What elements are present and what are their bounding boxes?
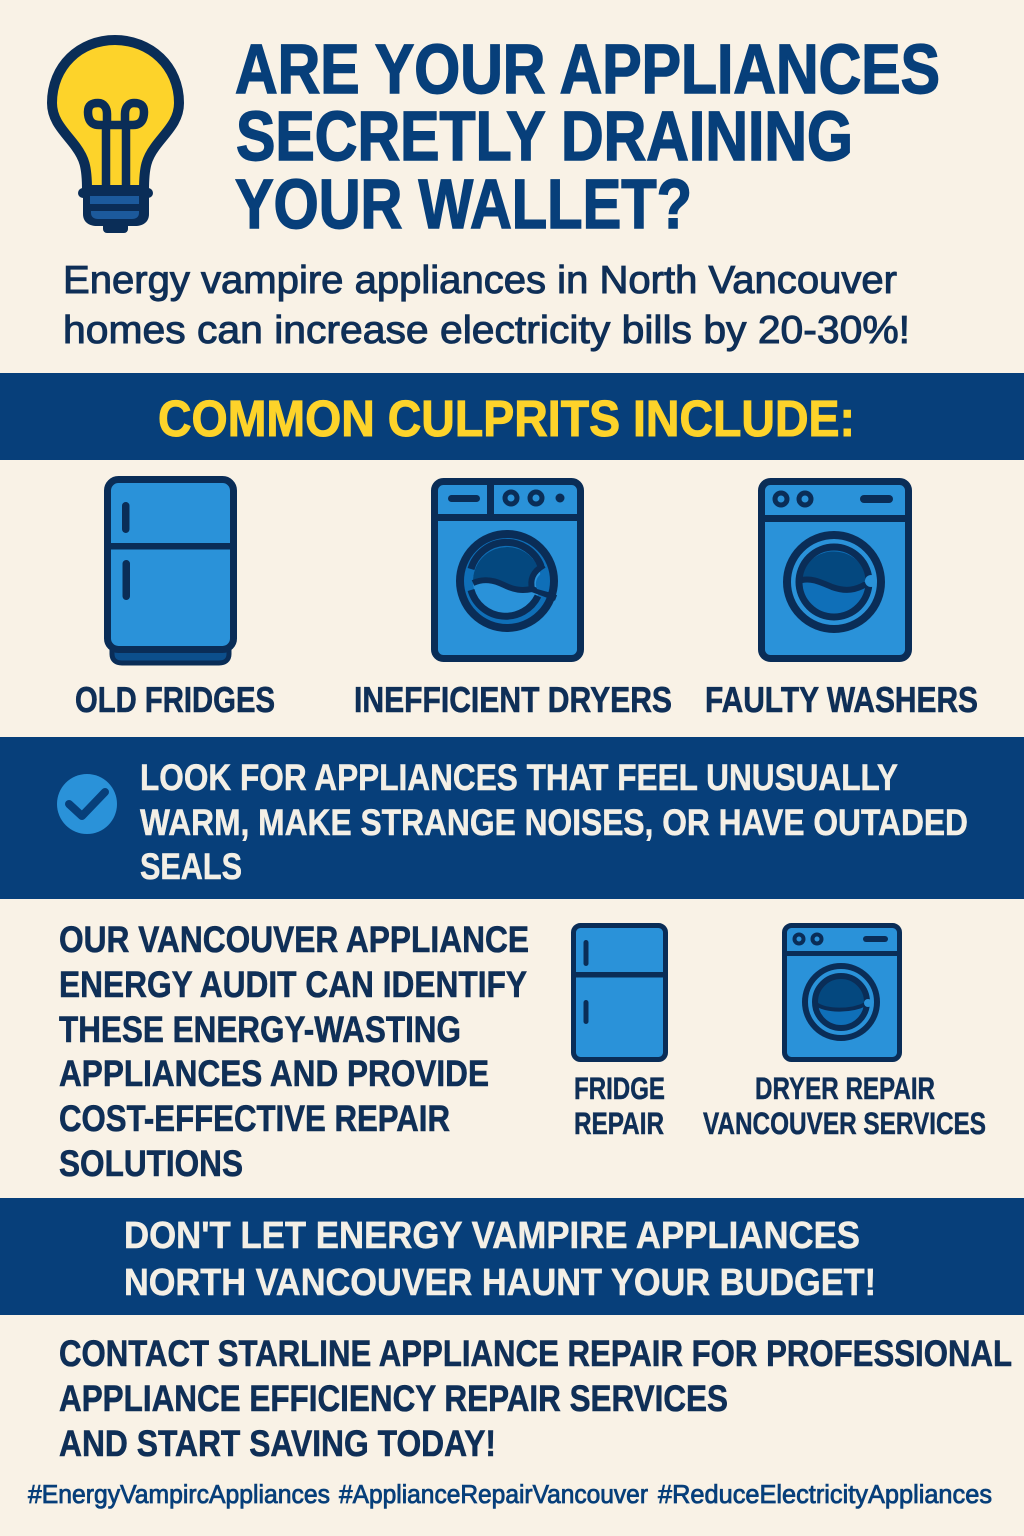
appliance labels: OLD FRIDGES xyxy=(75,679,275,720)
icon labels: repair services: FRIDGE xyxy=(574,1071,665,1106)
callout text: LOOK FOR APPLIANCES THAT FEEL UNUSUALLY xyxy=(140,757,898,798)
hashtags: #ApplianceRepairVancouver xyxy=(339,1479,648,1509)
callout text xyxy=(140,757,968,887)
text block: energy audit: OUR VANCOUVER APPLIANCE xyxy=(59,919,529,960)
call to action xyxy=(59,1333,1012,1464)
title: YOUR WALLET? xyxy=(235,165,692,243)
subtitle xyxy=(63,259,910,352)
banner: energy vampire warning xyxy=(0,1198,1024,1315)
icon labels: repair services xyxy=(574,1071,986,1141)
title xyxy=(235,30,940,243)
hashtags: #EnergyVampircAppliances xyxy=(28,1479,330,1509)
subtitle: Energy vampire appliances in North Vancouver xyxy=(63,259,897,302)
icon: dryer repair xyxy=(783,926,901,1060)
text block: energy audit: THESE ENERGY-WASTING xyxy=(59,1009,461,1050)
callout band: warning signs xyxy=(0,737,1024,899)
banner: energy vampire warning: NORTH VANCOUVER HAUNT YOUR BUDGET! xyxy=(124,1262,876,1304)
icon labels: repair services: REPAIR xyxy=(574,1106,664,1141)
title: SECRETLY DRAINING xyxy=(236,97,853,175)
heading band: common culprits: COMMON CULPRITS INCLUDE: xyxy=(158,390,855,447)
subtitle: homes can increase electricity bills by 20-30%! xyxy=(63,309,910,352)
hashtags xyxy=(28,1479,992,1509)
icon: check mark xyxy=(57,774,117,834)
text block: energy audit: SOLUTIONS xyxy=(59,1143,243,1184)
icon labels: repair services: DRYER REPAIR xyxy=(755,1071,935,1106)
call to action: AND START SAVING TODAY! xyxy=(59,1423,496,1464)
icon: old fridge xyxy=(105,480,236,663)
call to action: APPLIANCE EFFICIENCY REPAIR SERVICES xyxy=(59,1378,728,1419)
banner: energy vampire warning: DON'T LET ENERGY VAMPIRE APPLIANCES xyxy=(124,1215,860,1257)
appliance labels xyxy=(75,679,978,720)
hashtags: #ReduceElectricityAppliances xyxy=(658,1479,992,1509)
icon: fridge repair xyxy=(572,926,667,1060)
text block: energy audit: COST-EFFECTIVE REPAIR xyxy=(59,1098,450,1139)
icon: faulty washer xyxy=(759,482,911,658)
appliance labels: FAULTY WASHERS xyxy=(705,679,978,720)
callout text: SEALS xyxy=(140,846,242,887)
heading band: common culprits xyxy=(0,373,1024,460)
icon: light bulb xyxy=(52,40,179,233)
text block: energy audit xyxy=(59,919,529,1184)
text block: energy audit: APPLIANCES AND PROVIDE xyxy=(59,1053,489,1094)
text block: energy audit: ENERGY AUDIT CAN IDENTIFY xyxy=(59,964,527,1005)
appliance labels: INEFFICIENT DRYERS xyxy=(354,679,672,720)
icon: inefficient dryer xyxy=(432,480,582,658)
